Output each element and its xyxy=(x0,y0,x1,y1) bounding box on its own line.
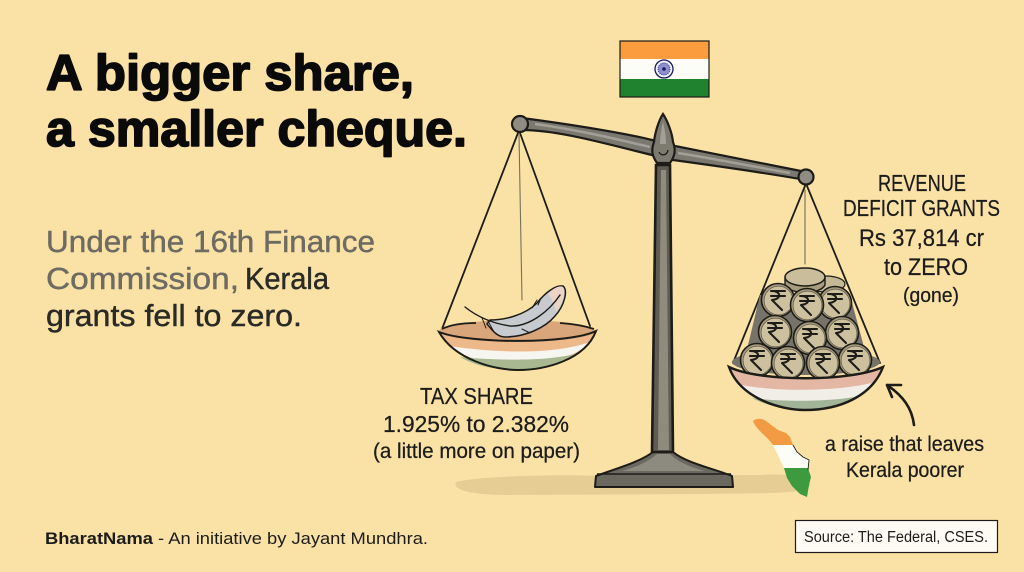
ground shadow xyxy=(455,475,810,495)
label: revenue deficit grants: Rs 37,814 cr xyxy=(859,225,984,252)
icon: feather xyxy=(465,286,565,337)
label: tax share: TAX SHARE xyxy=(420,383,533,409)
left pan strings xyxy=(442,133,590,329)
label: tax share xyxy=(373,383,580,463)
label: tax share: 1.925% to 2.382% xyxy=(383,411,569,437)
right pan xyxy=(729,367,883,410)
title: A bigger share, xyxy=(46,45,414,101)
arrow xyxy=(887,385,914,425)
label: tax share: (a little more on paper) xyxy=(373,440,580,463)
subtitle: grants fell to zero. xyxy=(46,298,302,333)
footer credit: BharatNama - An initiative by Jayant Mundhra. xyxy=(45,529,428,548)
subtitle: Commission, xyxy=(46,261,239,296)
subtitle: Under the 16th Finance xyxy=(46,224,375,259)
scale xyxy=(512,114,814,487)
scale: finial xyxy=(652,114,675,163)
scale: right knob xyxy=(798,170,814,184)
right pan strings xyxy=(733,186,880,363)
coin pile xyxy=(732,268,880,380)
callout: a raise that leaves Kerala poorer xyxy=(825,433,984,482)
icon: Indian flag xyxy=(620,41,709,97)
scale: beam xyxy=(522,118,806,180)
scale: base xyxy=(595,452,733,487)
label: revenue deficit grants: (gone) xyxy=(903,285,959,307)
icon: Kerala map xyxy=(753,419,811,497)
scale: left knob xyxy=(512,116,528,132)
left pan xyxy=(439,320,596,370)
title xyxy=(46,45,467,157)
source box xyxy=(796,520,998,552)
source box: Source: The Federal, CSES. xyxy=(804,529,988,546)
label: revenue deficit grants xyxy=(843,170,1000,307)
label: revenue deficit grants: REVENUE xyxy=(878,170,966,196)
label: revenue deficit grants: to ZERO xyxy=(884,254,968,281)
subtitle xyxy=(46,224,375,333)
scale: pillar xyxy=(652,165,673,452)
callout: a raise that leaves Kerala poorer: a raise that leaves xyxy=(825,433,984,456)
subtitle: Kerala xyxy=(245,261,330,296)
callout: a raise that leaves Kerala poorer: Kerala poorer xyxy=(846,459,964,482)
title: a smaller cheque. xyxy=(46,101,467,157)
